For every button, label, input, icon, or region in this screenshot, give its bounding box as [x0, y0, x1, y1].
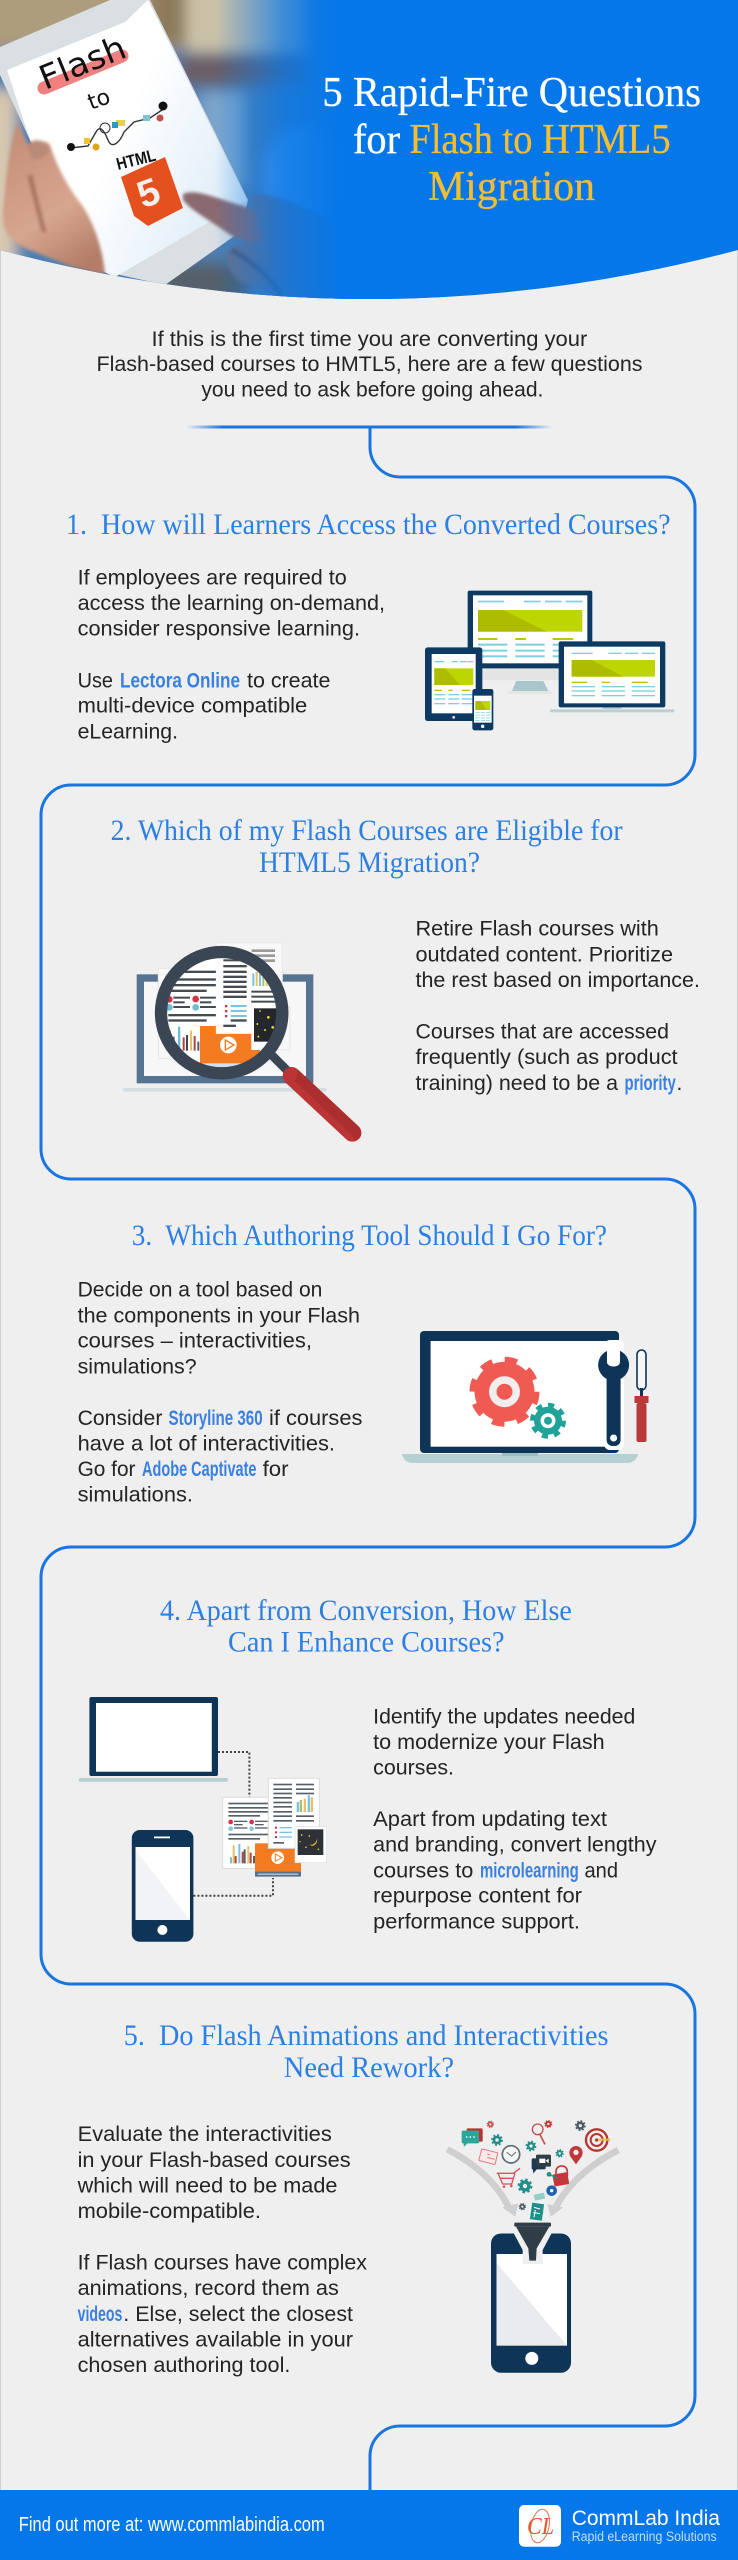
text block 1: eLearning.: [78, 720, 178, 743]
heading 4: Can I Enhance Courses?: [228, 1626, 504, 1659]
text block 3: have a lot of interactivities.: [78, 1433, 335, 1456]
text block 5: alternatives available in your: [78, 2328, 353, 2351]
text block 5: If Flash courses have complex: [78, 2252, 368, 2275]
right hand pointing: [180, 190, 318, 298]
text block 5: . Else, select the closest: [123, 2303, 353, 2326]
text block 3: simulations?: [78, 1355, 197, 1378]
heading 5: [124, 2019, 609, 2084]
text block 4: and: [584, 1859, 618, 1882]
text block 1: Use: [78, 669, 113, 692]
title: Flash to HTML5: [409, 117, 671, 163]
text block 1: multi-device compatible: [78, 695, 307, 718]
panel: question 5: [77, 2019, 618, 2377]
text block 4: Identify the updates needed: [373, 1705, 635, 1728]
text block 1: to create: [247, 669, 330, 692]
text block 2: outdated content. Prioritize: [416, 943, 673, 966]
text block 5: animations, record them as: [78, 2277, 339, 2300]
icon: responsive devices: [425, 591, 674, 730]
icon: magnifier over laptop and documents: [123, 943, 361, 1141]
text block 5: videos: [78, 2303, 122, 2326]
text block 5: mobile-compatible.: [78, 2200, 261, 2223]
heading 4: [160, 1594, 572, 1659]
title: 5 Rapid-Fire Questions: [322, 70, 701, 116]
left hand holding tablet: [3, 123, 105, 275]
text block 3: Storyline 360: [168, 1407, 263, 1430]
header banner with photo of tablet: [0, 0, 738, 320]
text block 3: Go for: [78, 1458, 136, 1481]
heading 5: Need Rework?: [284, 2051, 454, 2084]
title: [322, 70, 701, 210]
text block 4: [373, 1705, 657, 1933]
heading 2: 2. Which of my Flash Courses are Eligible for: [111, 814, 623, 847]
text block 3: [78, 1279, 362, 1507]
title: for: [353, 117, 400, 163]
logo mark: [519, 2505, 561, 2547]
heading 5: 5. Do Flash Animations and Interactivities: [124, 2019, 609, 2052]
heading 2: [111, 814, 623, 879]
text block 1: [78, 566, 385, 743]
footer link text: Find out more at: www.commlabindia.com: [19, 2514, 325, 2536]
icon: laptop and phone linked to course documents: [79, 1697, 327, 1942]
text block 4: Apart from updating text: [373, 1808, 607, 1831]
text block 4: courses to: [373, 1859, 473, 1882]
text block 3: for: [263, 1458, 288, 1481]
heading 4: 4. Apart from Conversion, How Else: [160, 1594, 572, 1627]
intro text: you need to ask before going ahead.: [201, 379, 543, 402]
text block 1: access the learning on-demand,: [78, 592, 385, 615]
connector path through all sections: [41, 427, 695, 2490]
intro underline: [186, 426, 552, 428]
text block 2: frequently (such as product: [416, 1046, 678, 1069]
tablet screen artwork: Flash to HTML5: Flash: [33, 28, 131, 97]
text block 5: Evaluate the interactivities: [78, 2123, 332, 2146]
text block 1: consider responsive learning.: [78, 617, 360, 640]
text block 4: microlearning: [480, 1859, 579, 1882]
intro text: Flash-based courses to HMTL5, here are a few questions: [96, 353, 642, 376]
brand tagline: Rapid eLearning Solutions: [572, 2529, 717, 2544]
heading 1: 1. How will Learners Access the Converted Courses?: [66, 508, 671, 541]
text block 1: Lectora Online: [120, 669, 240, 692]
text block 3: Adobe Captivate: [142, 1458, 256, 1481]
tablet screen artwork: Flash to HTML5: 5: [132, 170, 166, 217]
footer bar: [0, 2490, 738, 2560]
panel: question 3: [78, 1219, 649, 1507]
text block 2: priority: [624, 1072, 676, 1095]
tablet screen artwork: Flash to HTML5: HTML: [114, 146, 158, 174]
intro text: If this is the first time you are converting your: [152, 328, 587, 351]
text block 2: training) need to be a: [416, 1072, 618, 1095]
panel: question 2: [111, 814, 700, 1141]
text block 5: which will need to be made: [77, 2174, 337, 2197]
text block 2: Courses that are accessed: [416, 1020, 669, 1043]
logo mark: CL: [527, 2514, 554, 2540]
title: Migration: [428, 164, 595, 210]
text block 2: Retire Flash courses with: [416, 918, 659, 941]
blue fade overlay: [218, 0, 440, 299]
icon: content funnelled into phone: [447, 2121, 618, 2373]
heading 2: HTML5 Migration?: [259, 846, 480, 879]
text block 2: .: [676, 1072, 682, 1095]
brand name: CommLab India: [572, 2507, 720, 2530]
text block 3: courses – interactivities,: [78, 1330, 312, 1353]
text block 4: repurpose content for: [373, 1885, 582, 1908]
text block 4: and branding, convert lengthy: [373, 1834, 657, 1857]
text block 4: performance support.: [373, 1910, 580, 1933]
tablet screen artwork: Flash to HTML5: [33, 28, 183, 226]
panel: question 4: [79, 1594, 657, 1942]
text block 3: if courses: [269, 1407, 362, 1430]
text block 4: to modernize your Flash: [373, 1731, 605, 1754]
text block 4: courses.: [373, 1756, 454, 1779]
text block 2: the rest based on importance.: [416, 969, 700, 992]
intro text: [96, 328, 642, 402]
text block 1: If employees are required to: [78, 566, 347, 589]
text block 3: Decide on a tool based on: [78, 1279, 322, 1302]
panel: question 1: [66, 508, 674, 743]
heading 3: 3. Which Authoring Tool Should I Go For?: [132, 1219, 607, 1252]
tablet screen artwork: Flash to HTML5: to: [85, 85, 114, 116]
text block 3: the components in your Flash: [78, 1304, 360, 1327]
icon: laptop with gears and tools: [402, 1331, 648, 1463]
text block 5: in your Flash-based courses: [78, 2149, 351, 2172]
text block 5: [77, 2123, 368, 2377]
text block 3: Consider: [78, 1407, 162, 1430]
text block 2: [416, 918, 700, 1095]
text block 3: simulations.: [78, 1484, 193, 1507]
text block 5: chosen authoring tool.: [78, 2354, 290, 2377]
